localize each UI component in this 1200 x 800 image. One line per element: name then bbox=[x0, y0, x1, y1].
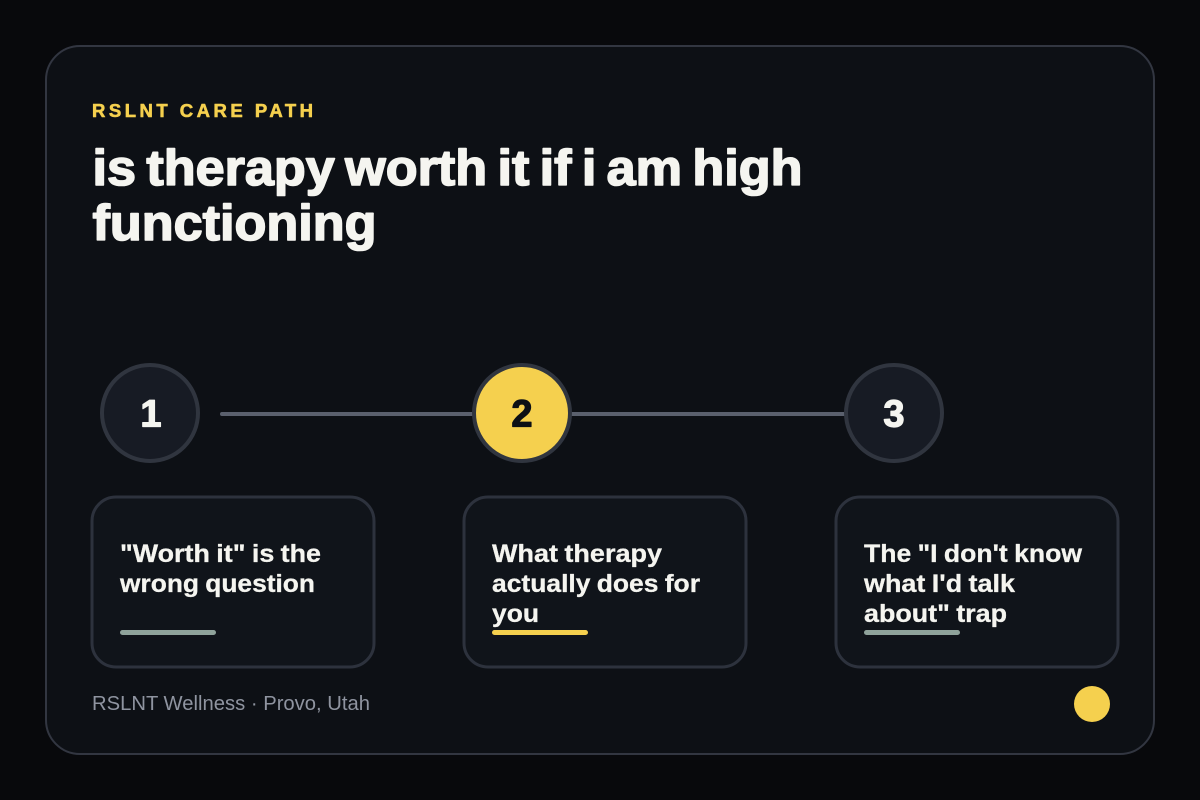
step 3 text: what I'd talk bbox=[863, 570, 1015, 598]
title: is therapy worth it if i am high bbox=[92, 140, 802, 196]
eyebrow label: RSLNT CARE PATH bbox=[92, 100, 313, 121]
step 2 text: actually does for bbox=[492, 570, 700, 598]
step 2 marker: 2 bbox=[511, 394, 533, 436]
step 3 marker bbox=[846, 365, 942, 461]
connector line: step 1 to step 2 bbox=[220, 412, 476, 416]
step 2 marker bbox=[474, 365, 570, 461]
step 2 text bbox=[492, 540, 700, 628]
title: functioning bbox=[92, 195, 376, 251]
step 2 accent bar bbox=[492, 630, 588, 635]
step 1 text bbox=[119, 540, 321, 598]
step 2 text: What therapy bbox=[492, 540, 662, 568]
step 1 text: wrong question bbox=[119, 570, 315, 598]
step 1 text: "Worth it" is the bbox=[120, 540, 321, 568]
step 3 text: The "I don't know bbox=[864, 540, 1083, 568]
panel: step 1 card bbox=[92, 497, 374, 667]
step 1 marker: 1 bbox=[140, 394, 162, 436]
panel: step 2 card bbox=[464, 497, 746, 667]
step 1 accent bar bbox=[120, 630, 216, 635]
icon: yellow dot bbox=[1074, 686, 1110, 722]
step 2 text: you bbox=[492, 600, 539, 628]
step 3 marker: 3 bbox=[883, 394, 905, 436]
title bbox=[92, 140, 802, 251]
connector line: step 2 to step 3 bbox=[568, 412, 848, 416]
panel: step 3 card bbox=[836, 497, 1118, 667]
footer text: RSLNT Wellness · Provo, Utah bbox=[92, 692, 370, 715]
step 3 text bbox=[863, 540, 1083, 628]
step 3 accent bar bbox=[864, 630, 960, 635]
step 1 marker bbox=[102, 365, 198, 461]
step 3 text: about" trap bbox=[864, 600, 1007, 628]
